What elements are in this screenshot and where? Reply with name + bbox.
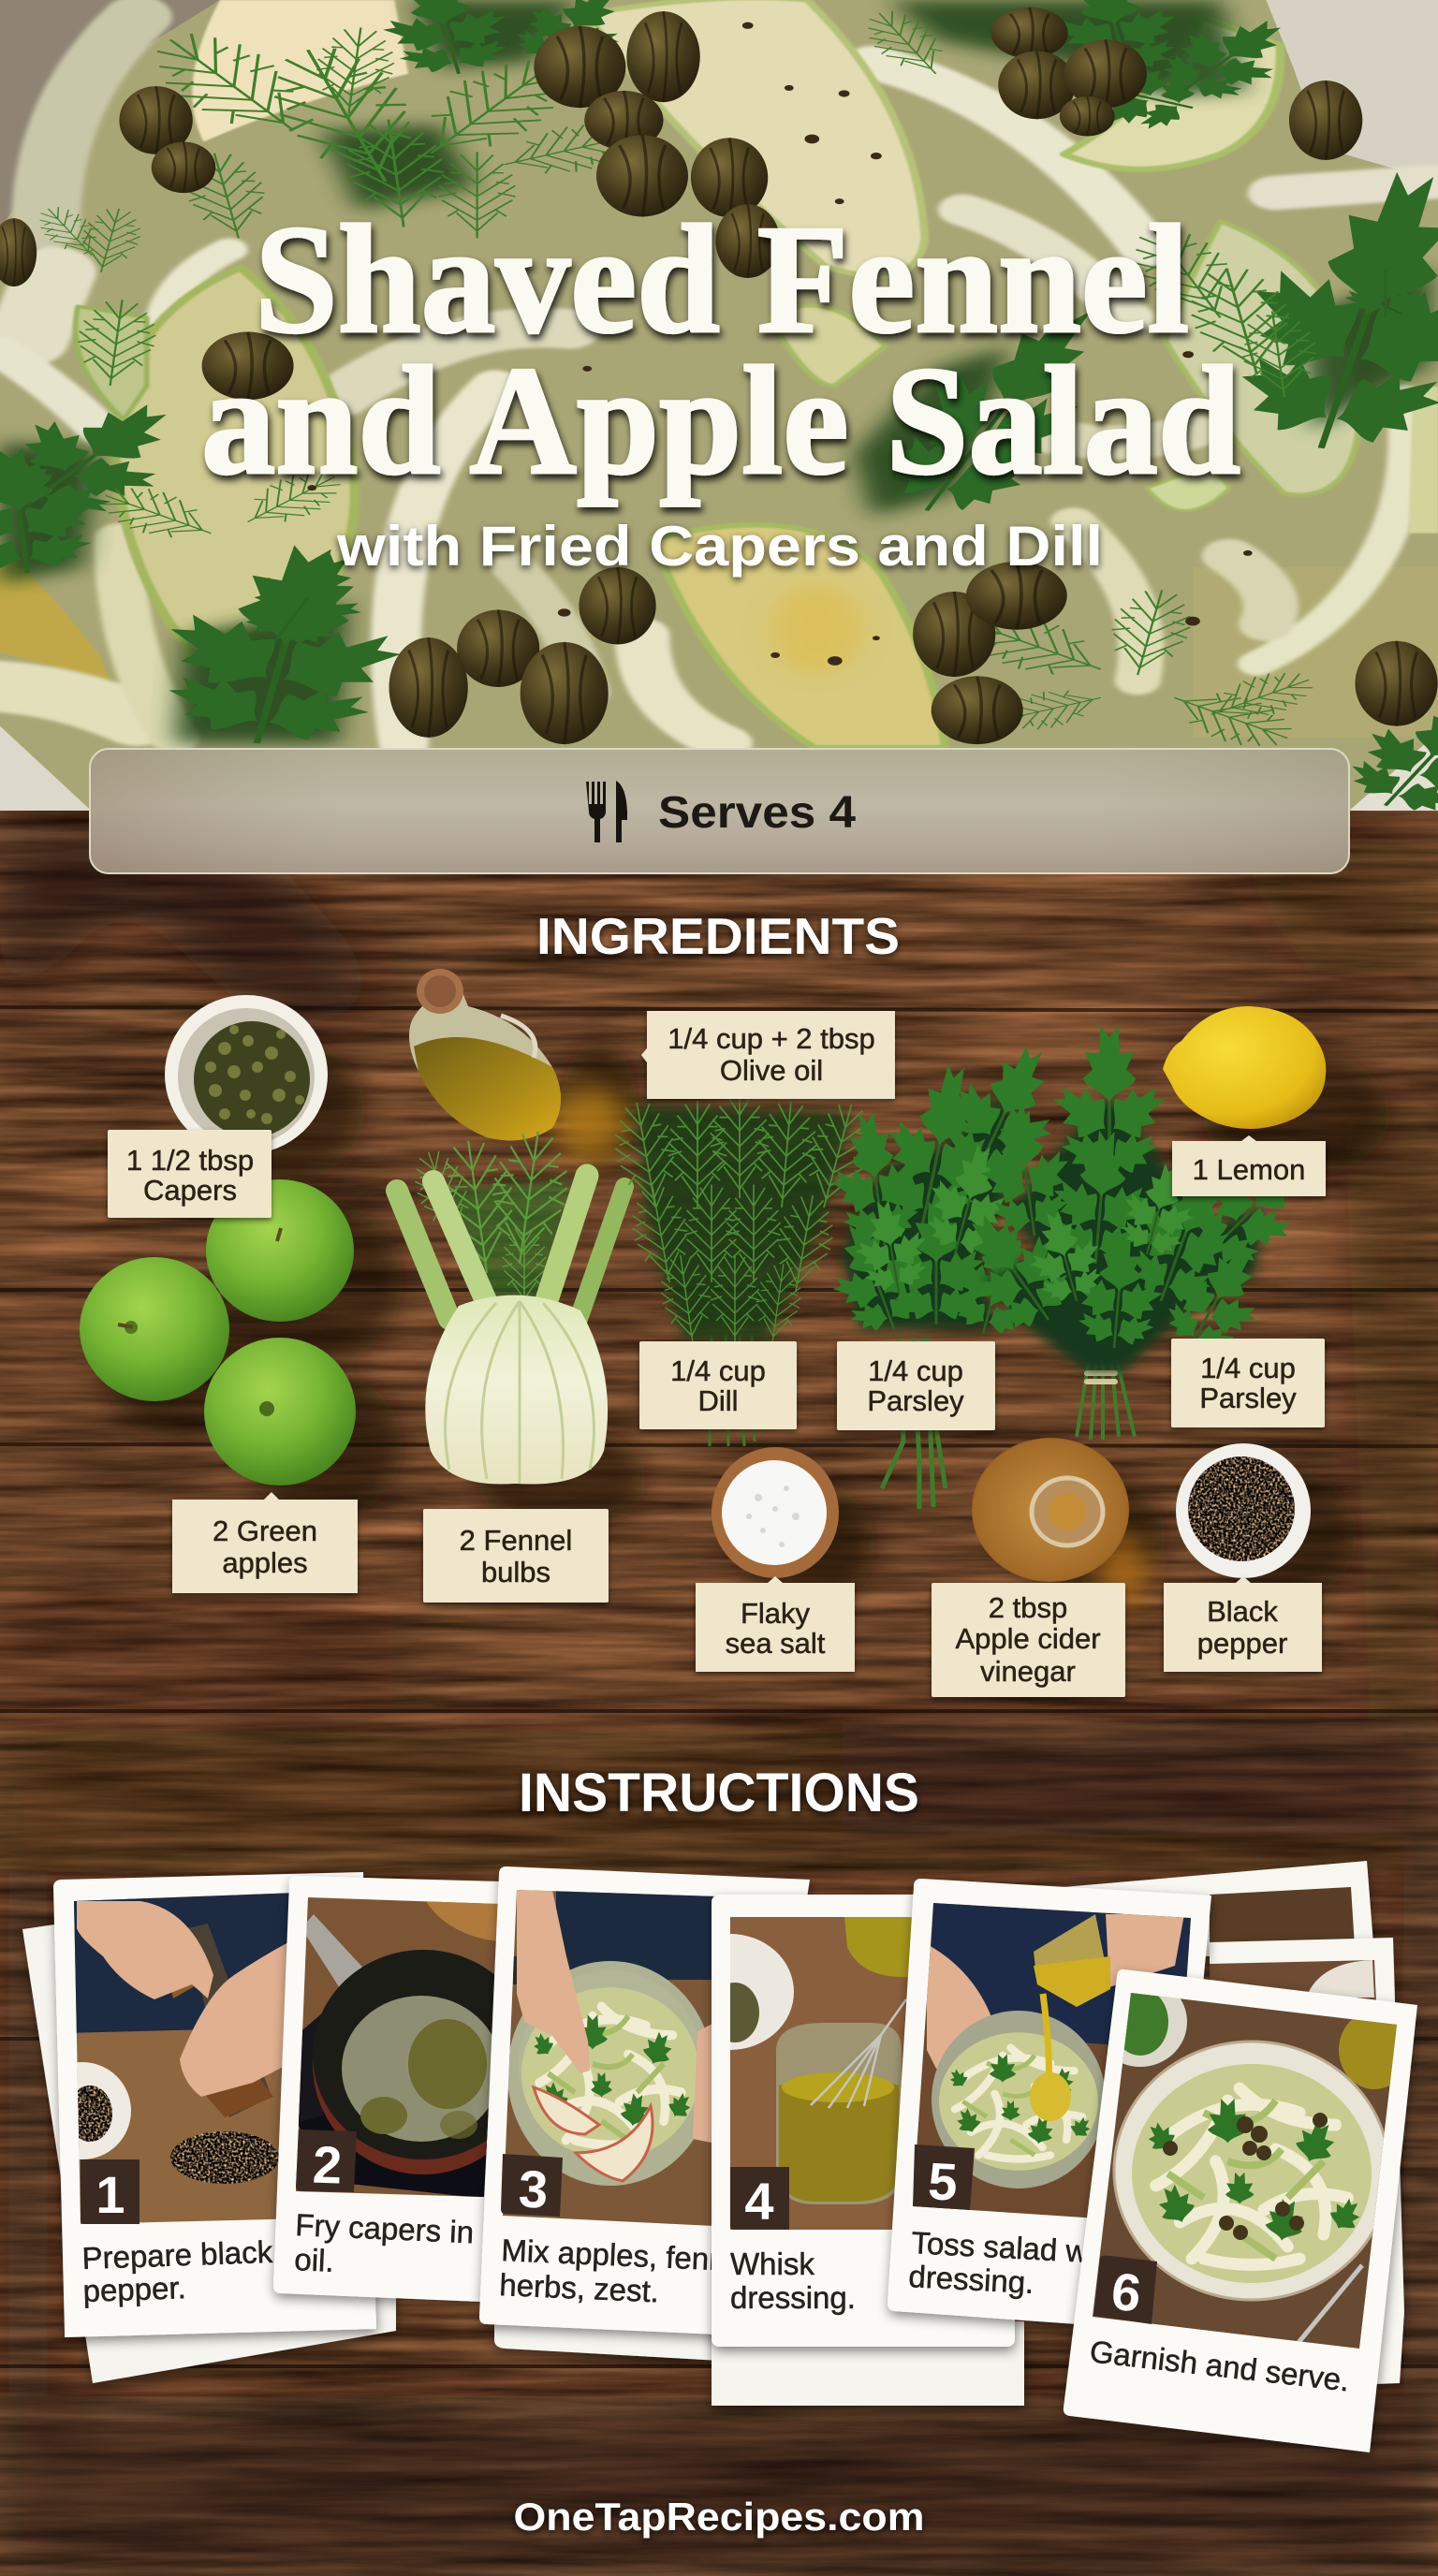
label: dill: 1/4 cup [670, 1354, 766, 1387]
step 6 number: 6 [1108, 2261, 1144, 2323]
label: black pepper: Black [1207, 1595, 1278, 1628]
step 5 text: Toss salad with [911, 2225, 1122, 2271]
label: parsley two: Parsley [1199, 1382, 1297, 1414]
step 2 photo [290, 1891, 534, 2204]
icon: olive oil bottle [409, 969, 627, 1161]
label: black pepper: pepper [1197, 1627, 1287, 1660]
step 6 number [1093, 2256, 1157, 2324]
icon: parsley bunch two [933, 1026, 1338, 1440]
step 4 card [667, 1895, 1015, 2347]
instructions heading: INSTRUCTIONS [519, 1763, 919, 1823]
icon: apple cider vinegar [972, 1438, 1150, 1610]
icon: dill bunch [608, 1091, 880, 1446]
wooden table background [0, 805, 1438, 2576]
step 3 text [499, 2232, 759, 2308]
step 1 text [81, 2234, 273, 2308]
subtitle: with Fried Capers and Dill [336, 515, 1103, 578]
title: and Apple Salad [201, 334, 1240, 506]
step 4 text: dressing. [730, 2280, 856, 2315]
icon: fennel bulb [397, 1126, 624, 1485]
back card A [1064, 1861, 1374, 1956]
label: sea salt [696, 1576, 855, 1672]
back card behind step 1 [22, 1910, 396, 2383]
step 3 photo [496, 1886, 721, 2232]
label: olive oil [641, 1011, 895, 1099]
label: dill [639, 1341, 797, 1429]
step 5 number: 5 [927, 2151, 959, 2212]
step 2 text: oil. [294, 2242, 334, 2278]
icon: black pepper bowl [1176, 1443, 1311, 1578]
ingredients heading: INGREDIENTS [536, 907, 900, 965]
step 5 card [888, 1879, 1211, 2331]
step 6 photo [1086, 1977, 1410, 2354]
step 4 photo [667, 1917, 913, 2230]
food base layer [0, 0, 1438, 812]
label: dill: Dill [697, 1384, 739, 1417]
label: lemon: 1 Lemon [1193, 1153, 1305, 1186]
icon: lemon [1163, 1006, 1326, 1129]
step 4 number [730, 2167, 789, 2231]
icon: fork and knife [586, 781, 627, 842]
back card B [1210, 1938, 1404, 2385]
step 3 number: 3 [518, 2159, 549, 2219]
step 4 text: Whisk [730, 2247, 814, 2281]
label: olive oil: Olive oil [720, 1054, 823, 1087]
label: vinegar: vinegar [980, 1655, 1076, 1688]
step 6 card [1064, 1969, 1417, 2452]
step 1 photo [34, 1891, 318, 2228]
label: capers: 1 1/2 tbsp [126, 1144, 254, 1177]
footer website: OneTapRecipes.com [513, 2495, 925, 2539]
step 3 text: Mix apples, fennel, [501, 2232, 759, 2278]
serves bar [90, 749, 1349, 873]
step 1 number [81, 2159, 139, 2224]
hero photo: salad close-up [0, 0, 1438, 830]
step 6 text: Garnish and serve. [1088, 2334, 1351, 2398]
pepper specks [307, 22, 1253, 666]
label: parsley one: 1/4 cup [868, 1354, 963, 1387]
step 1 text: pepper. [82, 2270, 186, 2308]
title [201, 193, 1240, 506]
capers [0, 7, 1438, 744]
label: sea salt: sea salt [726, 1627, 826, 1660]
label: fennel bulbs: 2 Fennel [460, 1524, 572, 1557]
apple slices [76, 0, 1438, 748]
label: green apples: 2 Green [213, 1515, 317, 1547]
step 5 number [913, 2144, 975, 2212]
step 3 text: herbs, zest. [499, 2267, 660, 2308]
label: parsley one [837, 1341, 995, 1430]
step 2 text: Fry capers in [295, 2207, 475, 2249]
label: capers: Capers [143, 1174, 237, 1207]
title: Shaved Fennel [255, 193, 1189, 365]
label: sea salt: Flaky [741, 1597, 811, 1630]
step 5 text [908, 2225, 1122, 2300]
icon: capers bowl [165, 995, 328, 1154]
step 4 number: 4 [744, 2172, 774, 2231]
label: lemon [1172, 1135, 1326, 1196]
label: black pepper [1164, 1576, 1322, 1672]
label: olive oil: 1/4 cup + 2 tbsp [668, 1022, 875, 1055]
step 4 text [730, 2247, 856, 2315]
label: green apples: apples [222, 1546, 308, 1579]
label: green apples [172, 1492, 358, 1593]
instruction cards [22, 1861, 1417, 2452]
label: parsley two [1171, 1339, 1325, 1427]
step 1 card [34, 1872, 376, 2337]
label: vinegar [932, 1583, 1125, 1697]
back card behind step 4 [712, 2321, 1024, 2406]
step 2 text [294, 2207, 475, 2278]
herbs: parsley and dill [0, 0, 1438, 830]
label: vinegar: 2 tbsp [989, 1591, 1067, 1624]
step 5 photo [908, 1900, 1198, 2228]
ingredients layout [80, 969, 1390, 1697]
step 1 number: 1 [95, 2165, 125, 2224]
label: vinegar: Apple cider [955, 1622, 1101, 1655]
icon: parsley bunch one [808, 1024, 1088, 1509]
back card behind step 3 [494, 2312, 721, 2361]
step 1 text: Prepare black [81, 2234, 273, 2276]
ground shadows [103, 1034, 1390, 1610]
step 3 number [501, 2154, 563, 2219]
label: parsley two: 1/4 cup [1200, 1352, 1296, 1384]
label: fennel bulbs [423, 1509, 609, 1603]
step 3 card [479, 1866, 810, 2335]
icon: green apples [80, 1179, 356, 1486]
step 2 number: 2 [312, 2134, 343, 2195]
icon: sea salt bowl [712, 1447, 839, 1578]
step 2 card [273, 1876, 534, 2302]
label: capers [108, 1130, 271, 1218]
step 5 text: dressing. [908, 2259, 1034, 2300]
fennel ribbons [0, 17, 1438, 743]
label: fennel bulbs: bulbs [481, 1556, 550, 1588]
label: parsley one: Parsley [867, 1384, 964, 1417]
step 2 number [296, 2130, 357, 2195]
serves text: Serves 4 [658, 788, 856, 838]
